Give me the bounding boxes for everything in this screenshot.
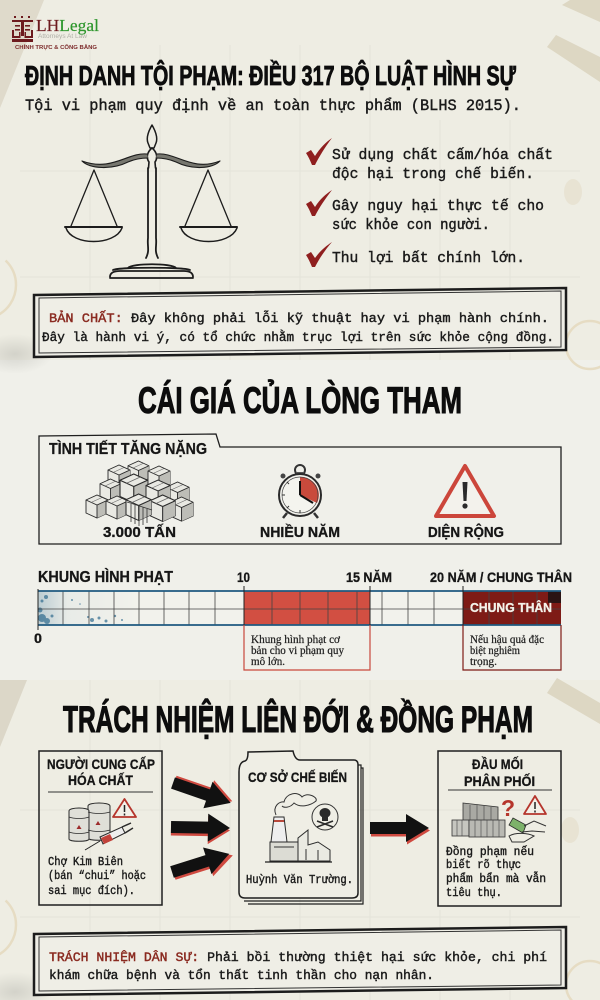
- panel: người cung cấp hóa chất: [39, 751, 162, 905]
- panel: cơ sở chế biến: CƠ SỞ CHẾ BIẾN: [248, 768, 347, 785]
- checklist: [306, 138, 553, 267]
- callout: chung thân: biệt nghiêm: [470, 645, 520, 657]
- panel: đầu mối phân phối: [438, 751, 561, 906]
- body text: sai mục đích).: [48, 884, 135, 898]
- timeline scale labels: 15 NĂM: [346, 569, 392, 585]
- timeline scale labels: [34, 568, 572, 646]
- heading: cái giá của lòng tham: CÁI GIÁ CỦA LÒNG THAM: [138, 379, 462, 421]
- logo: LHLegal: CHÍNH TRỰC & CÔNG BẰNG: [15, 43, 97, 51]
- logo: LHLegal: [12, 16, 99, 51]
- body text: phẩm bẩn mà vẫn: [446, 871, 546, 886]
- callout: chung thân: [463, 625, 561, 670]
- timeline scale labels: 0: [34, 630, 42, 646]
- check item 2: Gây nguy hại thực tế cho: [332, 198, 544, 215]
- check item 1: độc hại trong chế biến.: [332, 166, 534, 183]
- panel heading: TÌNH TIẾT TĂNG NẶNG: [49, 439, 207, 458]
- timeline scale labels: 20 NĂM / CHUNG THÂN: [430, 568, 572, 585]
- logo: LHLegal: LHLegal: [36, 16, 99, 35]
- check item 2: sức khỏe con người.: [332, 217, 490, 234]
- callout: bản chất: [34, 288, 566, 357]
- timeline heading: KHUNG HÌNH PHẠT: [38, 569, 173, 586]
- body text: (bán “chui” hoặc: [48, 869, 146, 883]
- callout: trách nhiệm dân sự: TRÁCH NHIỆM DÂN SỰ: Phải bồi thường thiệt hại sức khỏe, chi phí: [49, 950, 547, 965]
- callout: bản chất: Đây là hành vi ý, có tổ chức nhằm trục lợi trên sức khỏe cộng đồng.: [42, 329, 554, 345]
- check item 1: [306, 138, 553, 183]
- body text: biết rõ thực: [446, 858, 521, 872]
- callout: bản chất: BẢN CHẤT: Đây không phải lỗi kỹ thuật hay vi phạm hành chính.: [49, 310, 549, 326]
- icon: warning triangle: [436, 466, 494, 516]
- timeline bar: [38, 586, 561, 630]
- arrow: processor to distributor: [370, 814, 430, 844]
- callout: trách nhiệm dân sự: [34, 927, 566, 995]
- icon: pile of boxes: [86, 461, 193, 526]
- callout: khung cơ bản: bản cho vi phạm quy: [251, 645, 344, 657]
- body text: tiêu thụ.: [446, 886, 502, 900]
- timeline: khung hình phạt: [34, 568, 572, 670]
- panel: đầu mối phân phối: PHÂN PHỐI: [464, 772, 535, 789]
- arrow: supplier to processor, upper: [168, 768, 237, 816]
- label: chung thân: CHUNG THÂN: [470, 600, 552, 615]
- icon: containers, question mark, warning, money: [452, 795, 546, 842]
- panel: cơ sở chế biến: [239, 751, 363, 904]
- label: diện rộng: DIỆN RỘNG: [428, 523, 504, 541]
- logo: LHLegal: Attorneys At Law: [38, 34, 88, 40]
- panel: người cung cấp hóa chất: NGƯỜI CUNG CẤP: [47, 755, 155, 772]
- body text: [446, 845, 546, 900]
- callout: trách nhiệm dân sự: khám chữa bệnh và tổn thất tinh thần cho nạn nhân.: [49, 968, 434, 983]
- label: nhiều năm: NHIỀU NĂM: [260, 524, 340, 541]
- panel: người cung cấp hóa chất: HÓA CHẤT: [68, 771, 133, 788]
- icon: scales of justice: [65, 125, 237, 278]
- check item 3: [306, 242, 525, 267]
- icon: stopwatch: [279, 465, 321, 518]
- panel: đầu mối phân phối: ĐẦU MỐI: [472, 755, 523, 772]
- panel: tình tiết tăng nặng: [39, 434, 561, 544]
- body text: [48, 855, 146, 898]
- body text: Đồng phạm nếu: [446, 845, 534, 859]
- arrow: supplier to processor, middle: [171, 813, 230, 845]
- check item 3: Thu lợi bất chính lớn.: [332, 250, 525, 267]
- label: 3.000 tấn: 3.000 TẤN: [103, 524, 176, 541]
- callout: chung thân: Nếu hậu quả đặc: [470, 633, 544, 646]
- check item 2: [306, 190, 544, 234]
- panel: cơ sở chế biến: Huỳnh Văn Trường.: [246, 873, 353, 887]
- icon: chemical barrels and syringe: [69, 799, 136, 850]
- body text: Chợ Kim Biên: [48, 855, 123, 869]
- callout: khung cơ bản: [244, 625, 370, 670]
- icon: containers, question mark, warning, money: ?: [501, 795, 515, 821]
- arrow: supplier to processor, lower: [168, 840, 237, 888]
- timeline scale labels: 10: [237, 569, 250, 585]
- callout: chung thân: trọng.: [470, 656, 497, 668]
- callout: khung cơ bản: Khung hình phạt cơ: [251, 634, 341, 646]
- check item 1: Sử dụng chất cấm/hóa chất: [332, 147, 553, 164]
- subtitle: Tội vi phạm quy định về an toàn thực phẩm (BLHS 2015).: [25, 97, 521, 115]
- icon: polluting factory with skull: [265, 794, 338, 862]
- callout: khung cơ bản: mô lớn.: [251, 656, 285, 668]
